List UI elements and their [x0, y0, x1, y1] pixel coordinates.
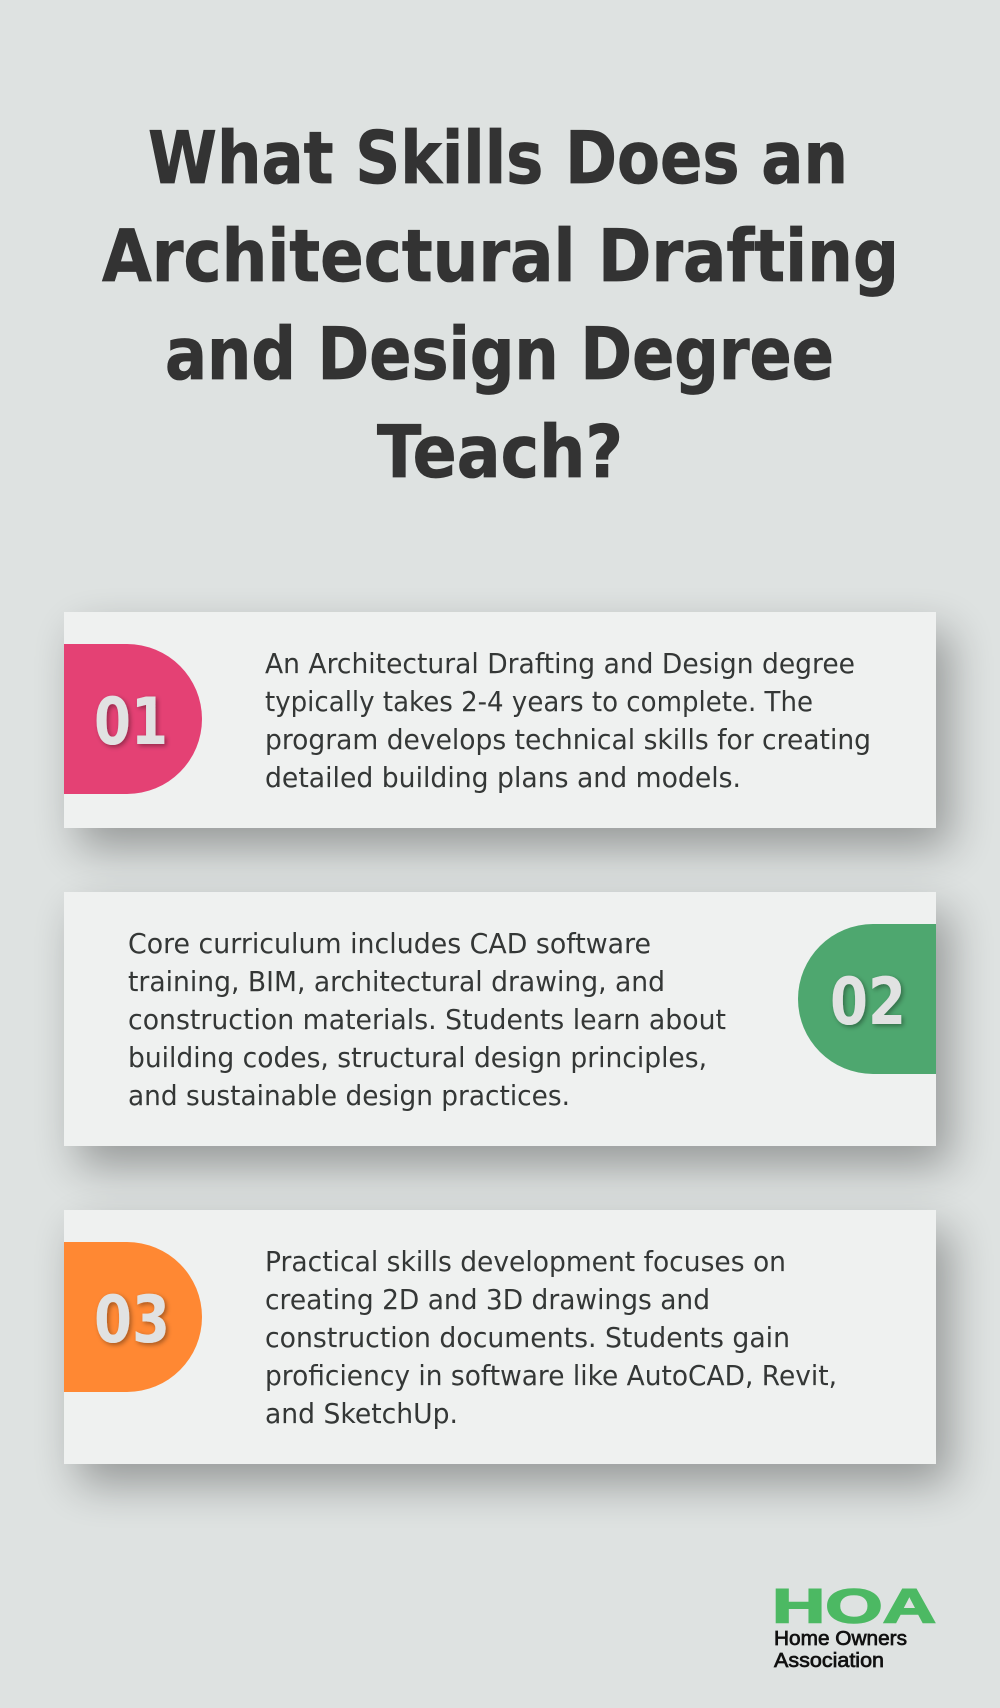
logo: HOA Home Owners Association	[772, 1580, 936, 1672]
text: step 1: typically takes 2-4 years to complete. The	[265, 685, 813, 718]
badge: 01: 01	[94, 685, 168, 760]
text: step 2: building codes, structural design principles,	[128, 1041, 707, 1074]
text: step 3: Practical skills development focuses on	[265, 1245, 786, 1278]
logo: HOA Home Owners Association: HOA	[772, 1580, 936, 1634]
panel: step 1	[64, 612, 950, 848]
text: step 1: program develops technical skills for creating	[265, 723, 871, 756]
title: and Design Degree	[165, 312, 834, 396]
text: step 2: Core curriculum includes CAD software	[128, 927, 651, 960]
text: step 1: detailed building plans and models.	[265, 761, 741, 794]
text: step 1	[265, 647, 871, 794]
text: step 3: and SketchUp.	[265, 1397, 458, 1430]
title: Architectural Drafting	[102, 214, 899, 298]
text: step 1: An Architectural Drafting and Design degree	[265, 647, 855, 680]
text: step 3: creating 2D and 3D drawings and	[265, 1283, 710, 1316]
panel: step 2	[64, 892, 950, 1166]
panel: step 3	[64, 1210, 950, 1484]
text: step 2: training, BIM, architectural drawing, and	[128, 965, 665, 998]
text: step 2	[128, 927, 726, 1112]
text: step 3	[265, 1245, 837, 1430]
text: step 3: proficiency in software like AutoCAD, Revit,	[265, 1359, 837, 1392]
badge: 02: 02	[830, 965, 906, 1040]
badge: 02	[798, 924, 936, 1074]
badge: 01	[64, 644, 202, 794]
text: step 3: construction documents. Students gain	[265, 1321, 790, 1354]
text: step 2: construction materials. Students learn about	[128, 1003, 726, 1036]
logo: HOA Home Owners Association: Association	[774, 1650, 884, 1672]
title: What Skills Does an	[148, 116, 848, 200]
title: Teach?	[377, 410, 623, 494]
badge: 03	[64, 1242, 202, 1392]
text: step 2: and sustainable design practices.	[128, 1079, 570, 1112]
title	[102, 116, 899, 494]
logo: HOA Home Owners Association: Home Owners	[774, 1628, 907, 1650]
badge: 03: 03	[94, 1283, 170, 1358]
